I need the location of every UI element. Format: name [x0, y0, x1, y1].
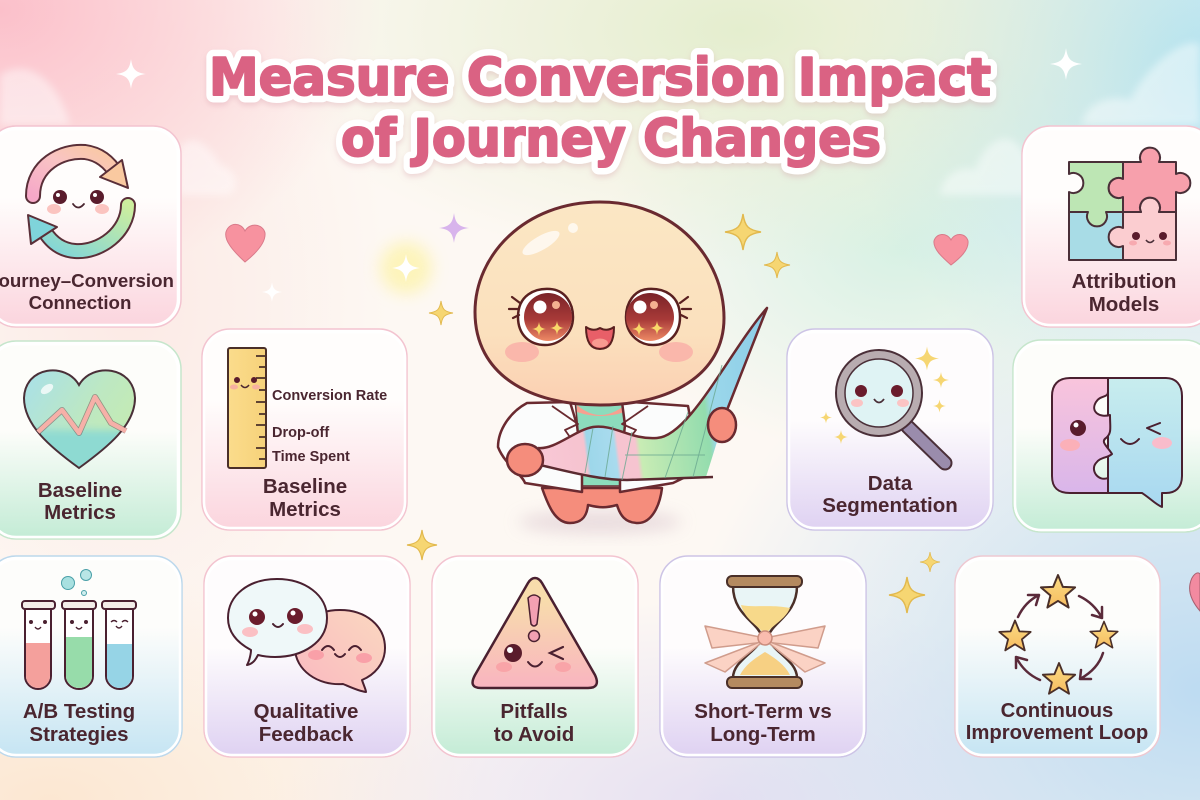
label: Short-Term vs [694, 700, 832, 723]
metric labels: Time Spent [272, 449, 350, 465]
panel: data segmentation [787, 329, 993, 530]
label: A/B Testing [23, 700, 135, 723]
label: Metrics [269, 498, 341, 521]
icon: test tubes [22, 570, 136, 689]
title: of Journey Changes [341, 109, 881, 169]
metric labels: Conversion Rate [272, 388, 387, 404]
eyes [509, 289, 691, 345]
label: Pitfalls [500, 700, 568, 723]
icon: star loop [999, 575, 1118, 694]
label: Qualitative [254, 700, 358, 723]
icon: ruler [228, 348, 266, 468]
label: Baseline [263, 475, 347, 498]
metric labels [272, 388, 387, 465]
label: Metrics [44, 501, 116, 524]
mouth [586, 327, 614, 349]
clouds [0, 43, 1200, 195]
label: Connection [29, 292, 131, 313]
panel: baseline metrics heart [0, 341, 181, 539]
label: Improvement Loop [966, 722, 1148, 744]
label: Continuous [1001, 700, 1113, 722]
title: of Journey Changes [341, 109, 881, 169]
icon: heart chart [23, 369, 136, 470]
neck and shirt [575, 400, 627, 486]
label: Strategies [29, 723, 129, 746]
sparkles and hearts [116, 48, 1200, 613]
panel: blended chat [1013, 340, 1200, 532]
lab coat [498, 402, 582, 492]
panel: continuous improvement loop [955, 556, 1160, 757]
label: Attribution [1072, 270, 1176, 293]
title: Measure Conversion Impact [209, 48, 991, 108]
icon: cycle arrows [28, 152, 128, 251]
chart sheet [538, 308, 767, 480]
head [475, 202, 724, 405]
label: Models [1089, 293, 1159, 316]
icon: puzzle [1069, 148, 1190, 260]
label: Baseline [38, 479, 122, 502]
icon: magnifier [820, 346, 949, 463]
icon: puzzle speech bubble [1052, 378, 1182, 507]
icon: hourglass with ribbon [705, 576, 825, 688]
label: Feedback [259, 723, 354, 746]
label: to Avoid [494, 723, 574, 746]
icon: warning triangle [473, 578, 597, 688]
legs [542, 488, 662, 523]
icon: speech bubbles [228, 579, 385, 692]
title [209, 48, 991, 169]
panel: qualitative feedback [204, 556, 410, 757]
panel: short-term vs long-term [660, 556, 866, 757]
panel: journey-conversion connection [0, 126, 181, 327]
panel: baseline metrics ruler [202, 329, 407, 530]
mascot [475, 202, 767, 534]
cheeks [505, 342, 539, 362]
panel: pitfalls [432, 556, 638, 757]
panel: a/b testing [0, 556, 182, 757]
label: Segmentation [822, 494, 958, 517]
label: Data [868, 472, 913, 495]
label: Long-Term [710, 723, 816, 746]
panel: attribution models [1022, 126, 1200, 327]
hands [507, 444, 543, 476]
metric labels: Drop-off [272, 425, 329, 441]
title: Measure Conversion Impact [209, 48, 991, 108]
